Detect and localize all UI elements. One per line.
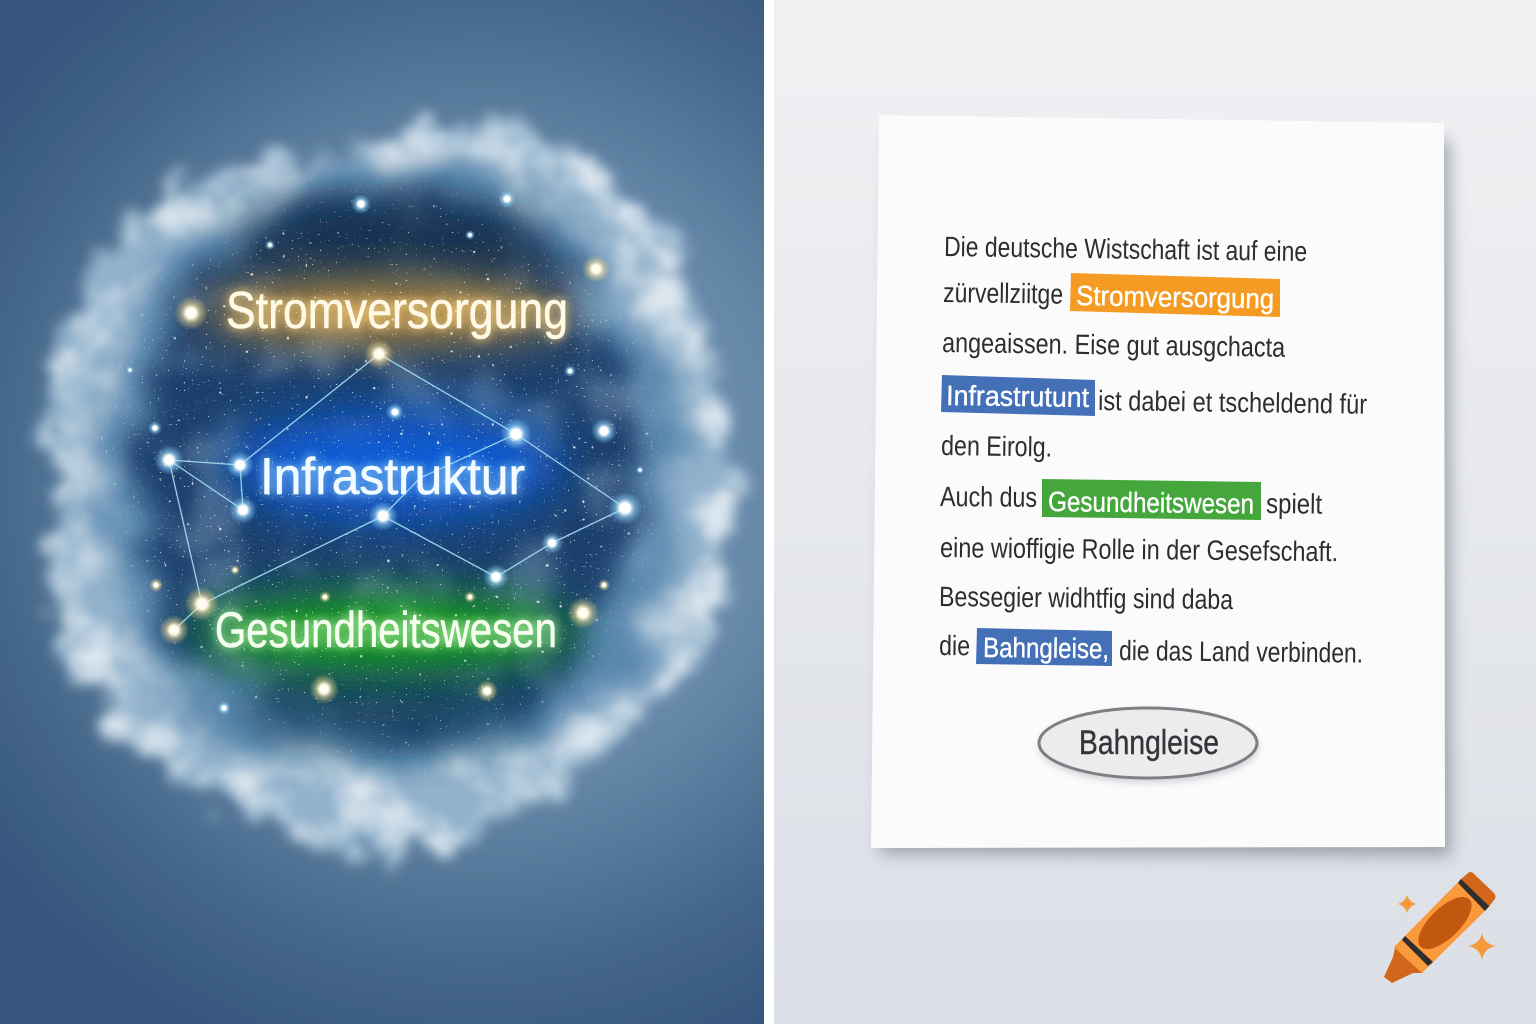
outer cloud <box>48 118 730 854</box>
label: Gesundheitswesen: Gesundheitswesen <box>215 602 557 658</box>
paper sheet <box>871 115 1445 848</box>
crayon oval <box>1410 889 1480 957</box>
line 4: ist dabei et tscheldend für <box>1098 385 1367 420</box>
crayon tip <box>1384 948 1422 983</box>
orange glow band <box>200 286 570 338</box>
highlight: Gesundheitswesen: Gesundheitswesen <box>1048 486 1254 520</box>
nebula wisps <box>100 180 670 750</box>
label: Gesundheitswesen: Gesundheitswesen <box>215 602 557 658</box>
right panel: light background <box>774 0 1536 1024</box>
line 8: Bessegier widhtfig sind daba <box>939 581 1234 615</box>
label: Stromversorgung: Stromversorgung <box>226 282 568 340</box>
sparkle small <box>1398 895 1416 913</box>
line 5: den Eirolg. <box>941 430 1052 463</box>
bright stars <box>126 190 644 715</box>
dark nebula core <box>142 200 642 735</box>
constellation lines <box>169 354 625 630</box>
cloud constellation illustration <box>48 118 730 854</box>
paper text block: spielt <box>1266 488 1322 520</box>
dark nebula top shade <box>230 200 550 290</box>
highlight: Bahngleise: Bahngleise, <box>983 632 1109 664</box>
crayon bands <box>1402 879 1489 966</box>
star field <box>80 164 693 772</box>
nebula mid layer <box>100 173 681 765</box>
line 9: die <box>939 630 970 661</box>
dark nebula bottom shade <box>235 680 535 740</box>
highlight: Stromversorgung: Stromversorgung <box>1076 280 1274 314</box>
sparkle large <box>1468 933 1496 960</box>
icon: orange crayon with sparkles <box>1384 872 1496 983</box>
line 3: angeaissen. Eise gut ausgchacta <box>942 327 1286 363</box>
blue glow band <box>230 413 560 517</box>
paper text block <box>939 231 1367 669</box>
line 2: zürvellziitge <box>943 277 1063 310</box>
paper shadow <box>880 132 1451 856</box>
label: Infrastruktur: Infrastruktur <box>260 448 525 506</box>
oval label: Bahngleise: Bahngleise <box>1079 724 1219 762</box>
highlight: Infrastruktur: Infrastrutunt <box>946 380 1090 413</box>
line 1: Die deutsche Wistschaft ist auf eine <box>944 231 1307 267</box>
oval label: Bahngleise <box>1039 708 1258 782</box>
line 6: Auch dus <box>940 481 1037 513</box>
green glow band <box>195 598 575 666</box>
line 7: eine wioffigie Rolle in der Gesefschaft. <box>940 532 1338 567</box>
left panel: night sky background <box>0 0 764 1024</box>
label: Infrastruktur: Infrastruktur <box>260 448 525 506</box>
label: Stromversorgung: Stromversorgung <box>226 282 568 340</box>
paper text block: die das Land verbinden. <box>1119 635 1363 669</box>
crayon body <box>1394 878 1490 973</box>
crayon cap <box>1460 872 1496 908</box>
